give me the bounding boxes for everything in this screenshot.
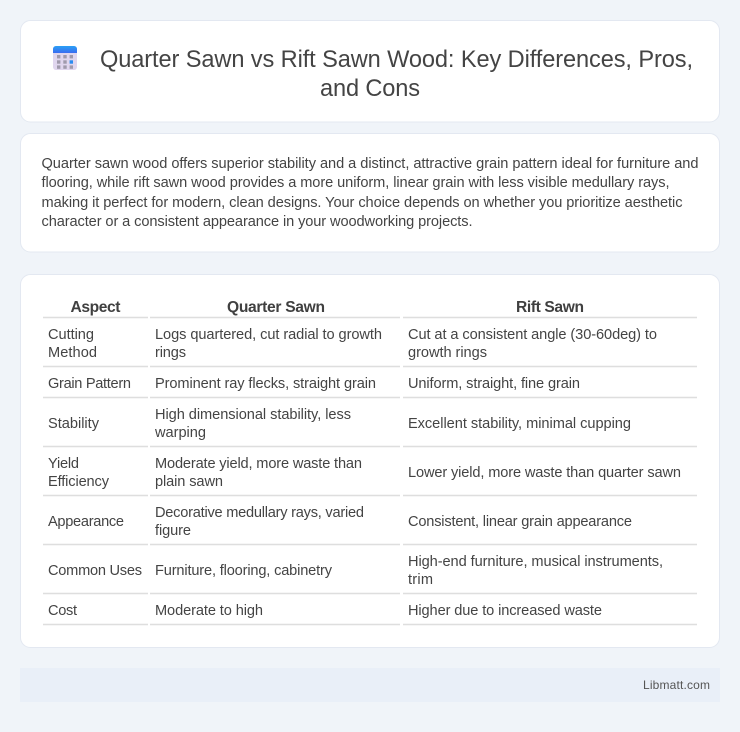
panel: comparison table	[20, 274, 720, 648]
icon: calendar	[53, 46, 77, 70]
row: common uses: Common Uses	[48, 563, 142, 579]
row: cutting method: rings	[155, 345, 186, 361]
row: cutting method: Cut at a consistent angle (30-60deg) to	[408, 327, 657, 343]
row: grain pattern: Prominent ray flecks, straight grain	[155, 376, 376, 392]
intro text	[42, 156, 698, 230]
row: appearance: Decorative medullary rays, varied	[155, 505, 364, 521]
row: appearance: Consistent, linear grain appearance	[408, 514, 632, 530]
row: common uses: Furniture, flooring, cabinetry	[155, 563, 333, 579]
footer	[20, 668, 720, 702]
row: cutting method	[48, 327, 657, 361]
row: common uses: High-end furniture, musical instruments,	[408, 554, 663, 570]
footer: Libmatt.com	[643, 678, 710, 692]
row: cost	[48, 603, 602, 619]
row: cutting method: Method	[48, 345, 97, 361]
table header row: Quarter Sawn	[227, 299, 325, 316]
row: yield efficiency: Yield	[48, 456, 79, 472]
row: cutting method: growth rings	[408, 345, 487, 361]
row: appearance: Appearance	[48, 514, 124, 530]
row: stability: Excellent stability, minimal cupping	[408, 416, 631, 432]
intro text: character or a consistent appearance in your woodworking projects.	[42, 214, 472, 230]
intro text: flooring, while rift sawn wood provides a more uniform, linear grain with less visible medullary rays,	[42, 175, 670, 191]
row: grain pattern: Grain Pattern	[48, 376, 131, 392]
row: yield efficiency	[48, 456, 681, 490]
row: cost: Cost	[48, 603, 77, 619]
intro text: Quarter sawn wood offers superior stability and a distinct, attractive grain pattern ideal for furniture and	[42, 156, 698, 172]
row: stability: High dimensional stability, less	[155, 407, 351, 423]
row: stability: Stability	[48, 416, 100, 432]
table header row: Rift Sawn	[516, 299, 584, 316]
table header row	[70, 299, 584, 316]
table header row: Aspect	[70, 299, 120, 316]
row: yield efficiency: plain sawn	[155, 474, 223, 490]
title: Quarter Sawn vs Rift Sawn Wood: Key Differences, Pros,	[100, 47, 693, 73]
row: yield efficiency: Lower yield, more waste than quarter sawn	[408, 465, 681, 481]
panel: intro	[20, 134, 720, 252]
row: grain pattern	[48, 376, 580, 392]
row: cutting method: Cutting	[48, 327, 94, 343]
row: stability: warping	[154, 425, 206, 441]
row: grain pattern: Uniform, straight, fine grain	[408, 376, 580, 392]
title: and Cons	[320, 76, 420, 102]
panel: header	[20, 20, 720, 122]
intro text: making it perfect for modern, clean designs. Your choice depends on whether you prioritize aesthetic	[42, 195, 682, 211]
row: cost: Moderate to high	[155, 603, 263, 619]
row: appearance	[48, 505, 632, 539]
row: yield efficiency: Efficiency	[48, 474, 110, 490]
row: cost: Higher due to increased waste	[408, 603, 602, 619]
row: yield efficiency: Moderate yield, more waste than	[155, 456, 362, 472]
title	[100, 47, 693, 102]
row: common uses	[48, 554, 663, 588]
row: appearance: figure	[155, 523, 191, 539]
row: cutting method: Logs quartered, cut radial to growth	[155, 327, 382, 343]
row: stability	[48, 407, 631, 441]
row: common uses: trim	[408, 572, 433, 588]
